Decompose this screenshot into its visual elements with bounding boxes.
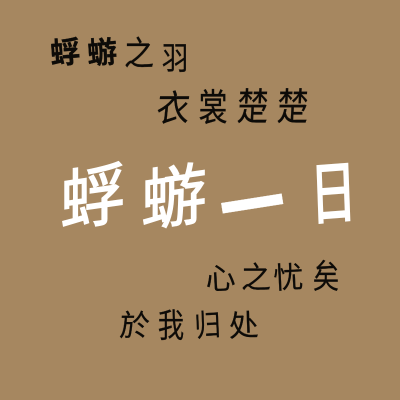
verse line: 衣裳楚楚	[155, 86, 310, 130]
verse line: 衣裳楚楚: 楚	[276, 86, 310, 129]
verse line: 蜉蝣之羽: 蜉	[49, 36, 81, 71]
verse line: 衣裳楚楚: 楚	[236, 86, 270, 129]
verse line: 於我归处: 处	[228, 309, 259, 344]
verse line: 於我归处: 归	[194, 308, 222, 344]
verse line: 蜉蝣之羽: 之	[124, 34, 154, 72]
verse line: 蜉蝣之羽: 羽	[162, 42, 188, 77]
main title: 蜉蝣一日: 日	[309, 156, 358, 234]
verse line: 蜉蝣之羽: 蝣	[86, 36, 118, 71]
verse line: 心之忧矣: 忧	[273, 261, 304, 296]
main title: 蜉蝣一日	[60, 156, 358, 256]
verse line: 衣裳楚楚: 衣	[155, 89, 192, 129]
verse line: 於我归处	[119, 308, 259, 345]
verse line: 衣裳楚楚: 裳	[198, 87, 228, 130]
verse line: 心之忧矣: 心	[205, 262, 236, 297]
verse line: 心之忧矣	[205, 259, 339, 297]
main title: 蜉蝣一日: 蜉	[60, 157, 126, 241]
verse line: 於我归处: 於	[119, 310, 151, 343]
main title: 蜉蝣一日: 蝣	[141, 157, 207, 241]
verse line: 於我归处: 我	[158, 308, 184, 345]
verse line: 心之忧矣: 之	[241, 262, 271, 295]
verse line: 蜉蝣之羽	[49, 34, 188, 77]
main title: 蜉蝣一日: 一	[213, 159, 292, 256]
verse line: 心之忧矣: 矣	[313, 259, 339, 296]
